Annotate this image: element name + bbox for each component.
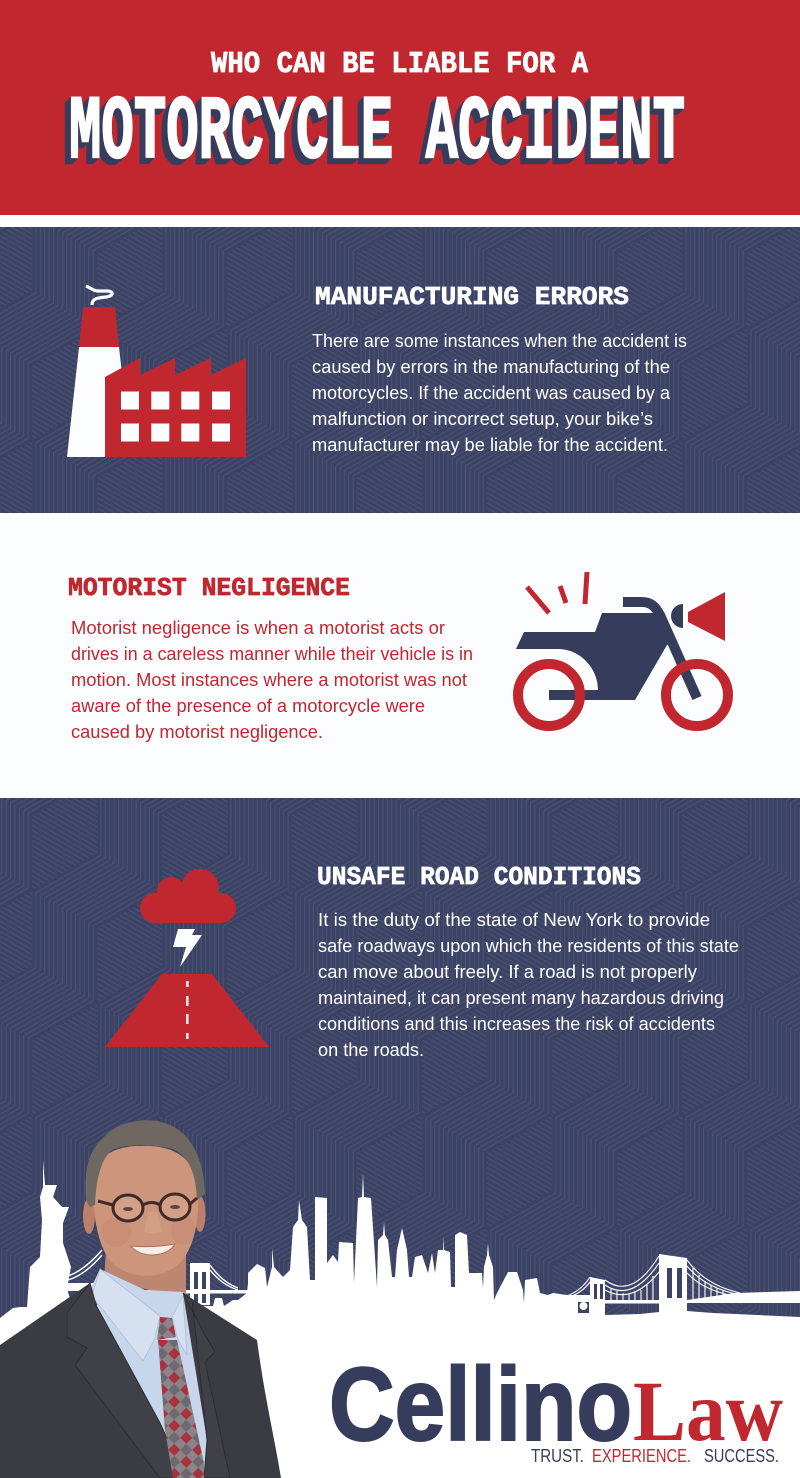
text block: unsafe road conditions (318, 910, 739, 1060)
text block: unsafe road conditions: on the roads. (318, 1040, 424, 1060)
text block: unsafe road conditions: can move about freely. If a road is not properly (318, 962, 697, 982)
panel: title banner (0, 0, 800, 215)
sub-element: Brooklyn bridge (567, 1256, 800, 1313)
text block: unsafe road conditions: maintained, it can present many hazardous driving (318, 988, 724, 1008)
text block: motorist negligence: aware of the presence of a motorcycle were (71, 696, 425, 716)
logo: tagline (531, 1446, 779, 1466)
sub-element: ears (83, 1196, 206, 1234)
panel: New York skyline (0, 1160, 800, 1478)
heading: motorist negligence: MOTORIST NEGLIGENCE (68, 573, 350, 603)
panel: attorney portrait (0, 1120, 281, 1478)
sub-element: glasses (98, 1194, 197, 1221)
panel: unsafe road conditions (0, 798, 800, 1338)
text block: unsafe road conditions: conditions and this increases the risk of accidents (318, 1014, 715, 1034)
sub-element: lapels (67, 1283, 230, 1478)
text block: motorist negligence (71, 618, 473, 742)
icon: motorcycle (516, 572, 728, 726)
panel: motorist negligence (0, 513, 800, 798)
logo: Cellino wordmark: Cellino (329, 1347, 632, 1463)
text block: motorist negligence: motion. Most instances where a motorist was not (71, 670, 467, 690)
text block: manufacturing errors: There are some instances when the accident is (312, 331, 687, 351)
title: subtitle line: WHO CAN BE LIABLE FOR A (211, 47, 588, 82)
text block: motorist negligence: Motorist negligence is when a motorist acts or (71, 618, 445, 638)
logo: tagline: TRUST. (531, 1446, 584, 1466)
text block: motorist negligence: caused by motorist negligence. (71, 722, 323, 742)
text block: unsafe road conditions: It is the duty of the state of New York to provide (318, 910, 710, 930)
text block: manufacturing errors: manufacturer may be liable for the accident. (312, 435, 668, 455)
text block: manufacturing errors: motorcycles. If the accident was caused by a (312, 383, 671, 403)
panel: manufacturing errors (0, 227, 800, 513)
icon: factory (67, 286, 246, 457)
logo: tagline: SUCCESS. (704, 1446, 779, 1466)
text block: manufacturing errors (312, 331, 687, 455)
text block: unsafe road conditions: safe roadways upon which the residents of this state (318, 936, 739, 956)
logo: Cellino Law (329, 1347, 783, 1466)
sub-element: shirt (90, 1269, 208, 1478)
sub-element: hair (86, 1120, 205, 1207)
text block: manufacturing errors: caused by errors in the manufacturing of the (312, 357, 670, 377)
sub-element: nose (144, 1212, 162, 1234)
sub-element: left bridge (68, 1250, 248, 1305)
logo: tagline: EXPERIENCE. (592, 1446, 691, 1466)
sub-element: shirt collar (92, 1269, 187, 1361)
sub-element: face (92, 1146, 198, 1276)
heading: unsafe road conditions: UNSAFE ROAD CONDITIONS (317, 862, 641, 892)
sub-element: cheeks (101, 1215, 195, 1247)
sub-element: tie (157, 1317, 204, 1478)
text block: motorist negligence: drives in a careless manner while their vehicle is in (71, 644, 473, 664)
sub-element: suit (0, 1283, 281, 1478)
sub-element: neck (104, 1250, 186, 1298)
sub-element: eyes (123, 1205, 180, 1211)
heading: manufacturing errors: MANUFACTURING ERRORS (315, 282, 629, 312)
logo: Law wordmark: Law (633, 1363, 783, 1459)
text block: manufacturing errors: malfunction or incorrect setup, your bike’s (312, 409, 653, 429)
sub-element: smile (131, 1244, 175, 1255)
icon: storm cloud over road (105, 869, 269, 1047)
